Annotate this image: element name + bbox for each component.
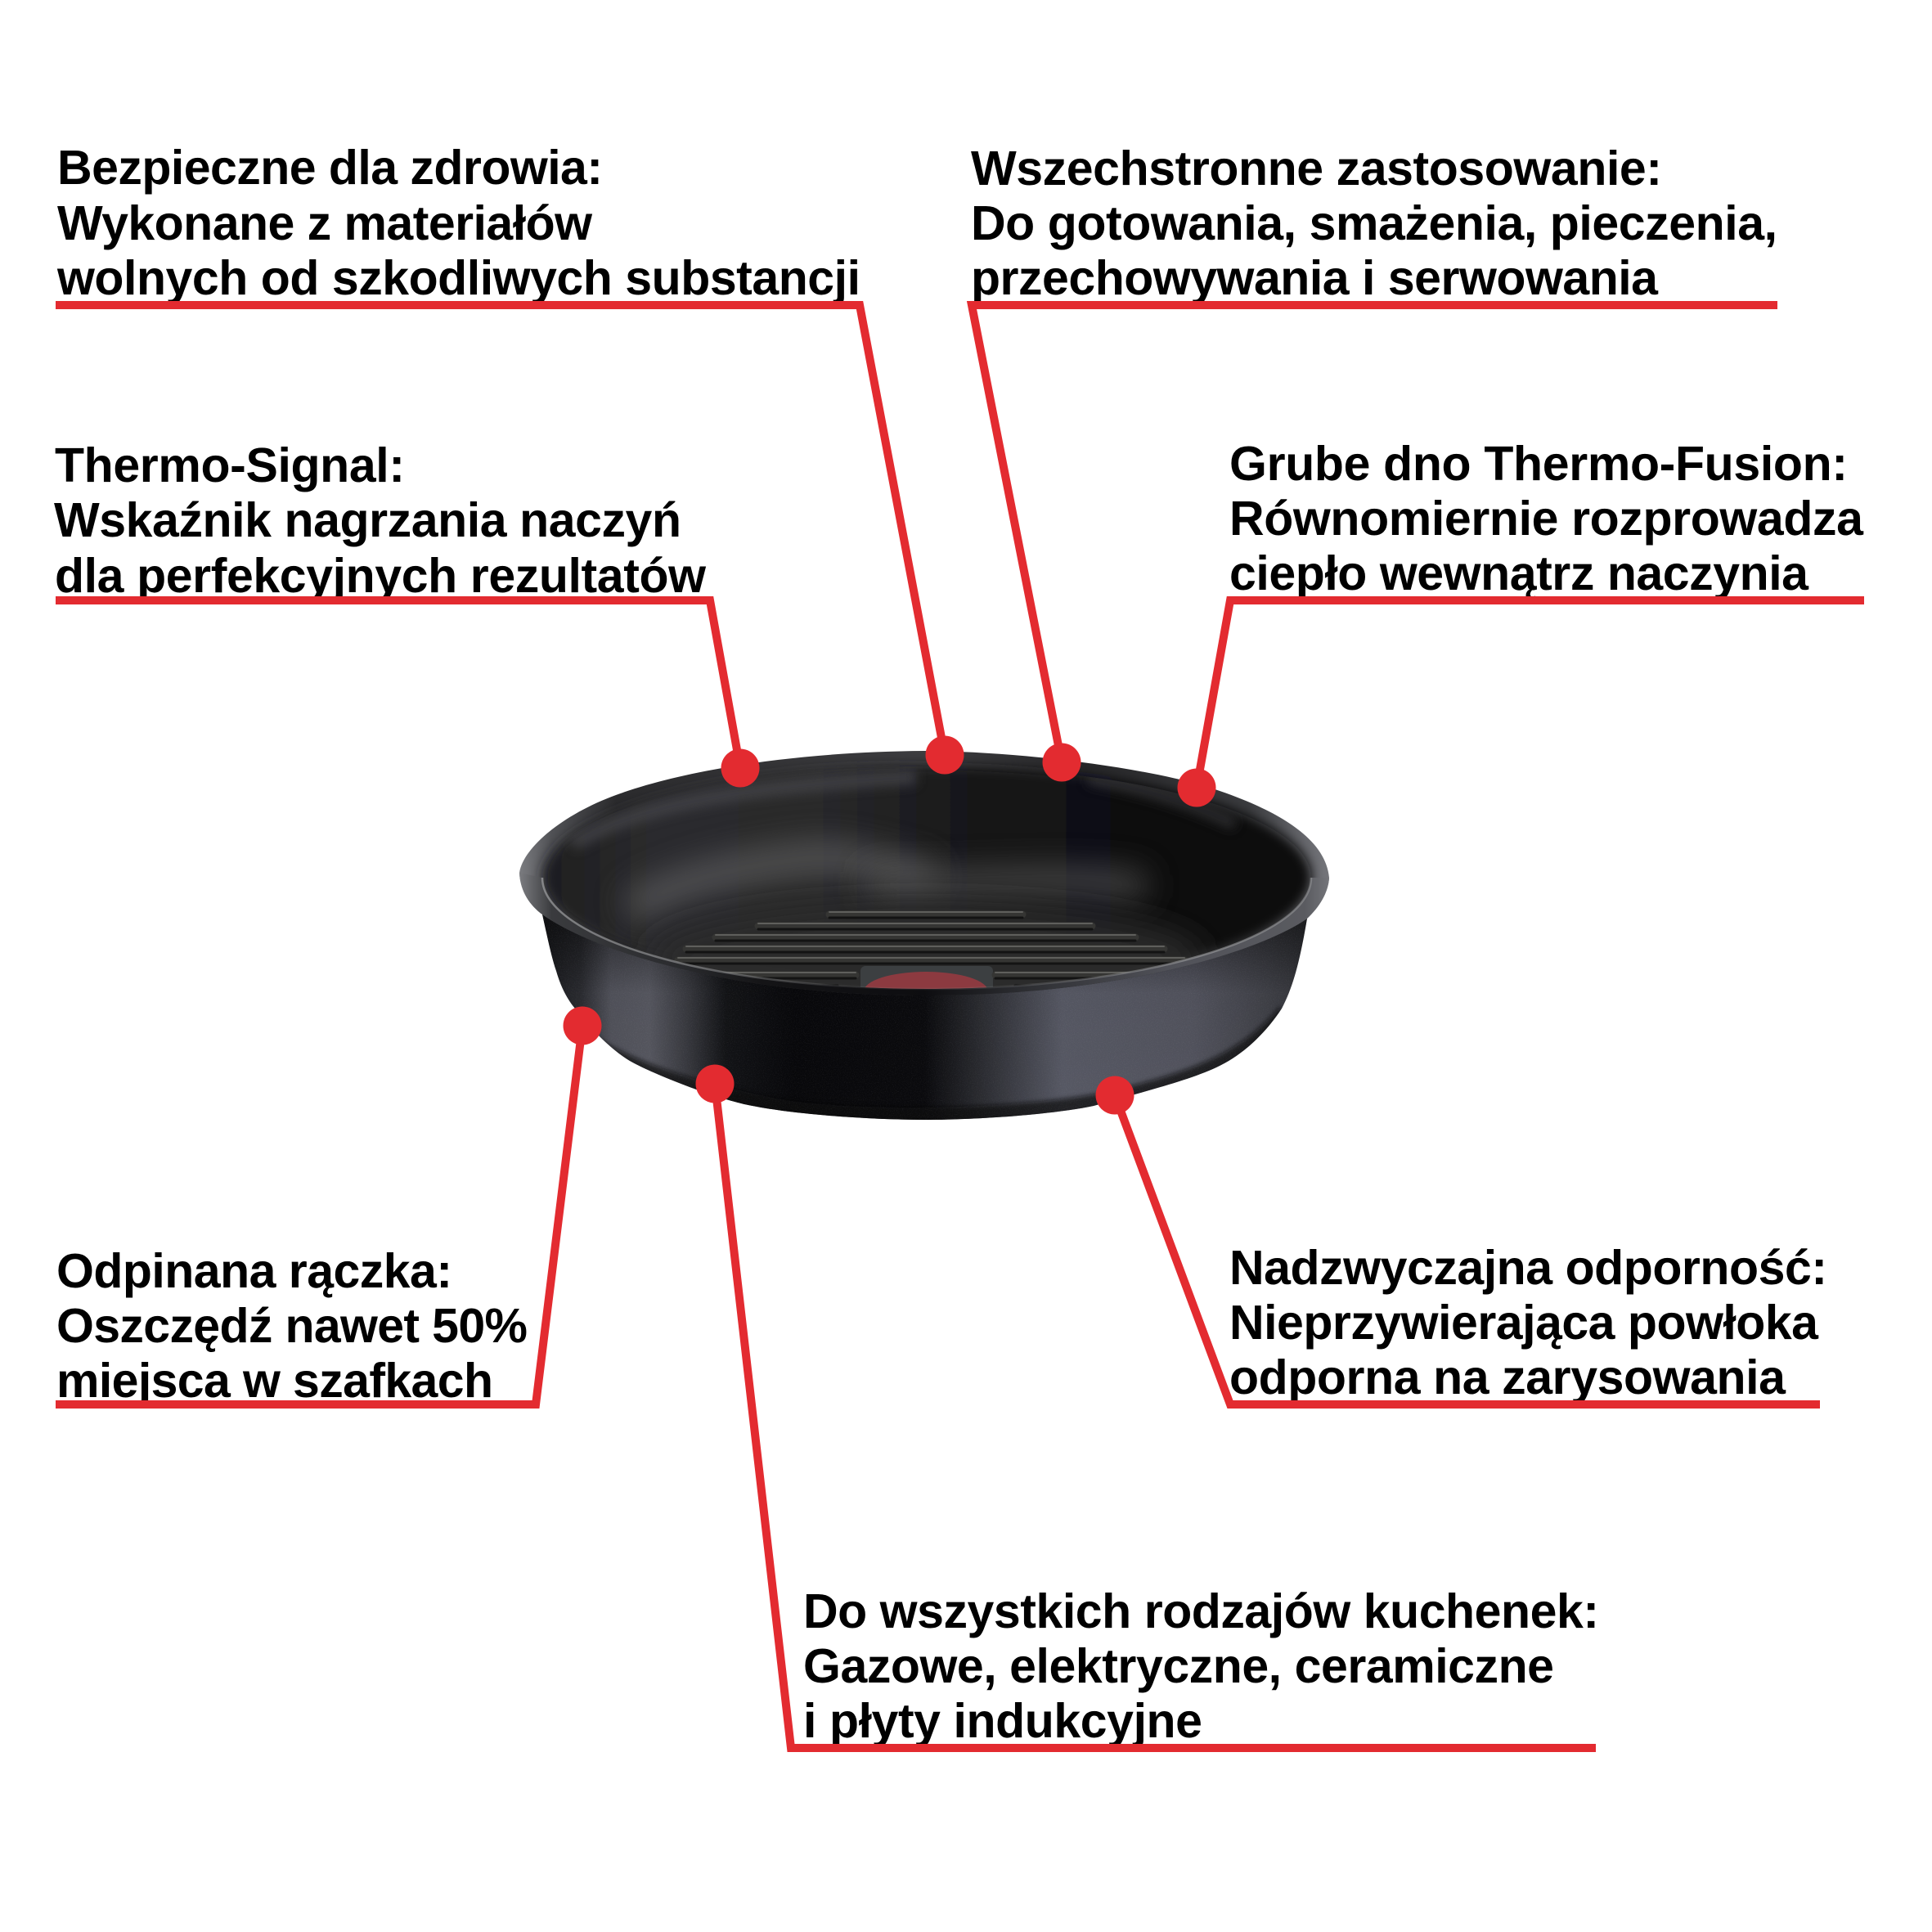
leader line: [56, 1026, 582, 1404]
marker dot: [1096, 1076, 1134, 1114]
text block: Równomiernie rozprowadza: [1229, 492, 1864, 546]
text block: i płyty indukcyjne: [803, 1694, 1202, 1748]
text block: odporna na zarysowania: [1229, 1350, 1786, 1404]
text block: dla perfekcyjnych rezultatów: [55, 549, 706, 603]
leader line: [1115, 1095, 1820, 1404]
text block: wolnych od szkodliwych substancji: [56, 251, 860, 305]
text block: Wszechstronne zastosowanie:: [971, 142, 1662, 195]
leader line: [972, 305, 1777, 762]
marker dot: [1178, 769, 1215, 806]
marker dot: [721, 749, 759, 787]
text block: [803, 1584, 1599, 1748]
leader line: [56, 305, 945, 755]
text block: Grube dno Thermo-Fusion:: [1229, 437, 1848, 491]
text block: Do gotowania, smażenia, pieczenia,: [971, 196, 1777, 250]
text block: Nieprzywierająca powłoka: [1229, 1296, 1819, 1350]
text block: [971, 142, 1777, 305]
marker dot: [926, 736, 964, 774]
callout: Grube dno Thermo-Fusion: [1178, 437, 1864, 806]
text block: Oszczędź nawet 50%: [56, 1299, 528, 1353]
leader line: [715, 1084, 1596, 1748]
text block: Gazowe, elektryczne, ceramiczne: [803, 1639, 1554, 1693]
pan outer body: [542, 914, 1307, 1120]
grill ridges: [678, 912, 1184, 986]
text block: Do wszystkich rodzajów kuchenek:: [803, 1584, 1599, 1638]
callout: Thermo-Signal: [54, 438, 759, 787]
pan rim lip: [519, 751, 1329, 995]
text block: Wskaźnik nagrzania naczyń: [54, 493, 681, 547]
text block: Thermo-Signal:: [55, 438, 405, 492]
grill floor: [857, 909, 1204, 986]
callout: Bezpieczne dla zdrowia: [56, 141, 964, 774]
illustration: grill pan: [515, 751, 1333, 1145]
text block: Nadzwyczajna odporność:: [1229, 1241, 1827, 1295]
marker dot: [695, 1065, 735, 1103]
text block: Odpinana rączka:: [56, 1244, 452, 1298]
text block: [54, 438, 706, 603]
text block: [56, 1244, 528, 1408]
pan front rim edge: [542, 878, 1311, 989]
leader line: [1197, 600, 1864, 788]
thermo-signal red spot: [865, 972, 986, 989]
marker dot: [563, 1006, 602, 1045]
pan front rim band: [519, 873, 1329, 995]
text block: Bezpieczne dla zdrowia:: [57, 141, 603, 195]
callout: Wszechstronne zastosowanie: [971, 142, 1777, 782]
callout: Odpinana rączka: [56, 1006, 602, 1408]
text block: ciepło wewnątrz naczynia: [1229, 546, 1809, 600]
text block: [1229, 1241, 1827, 1404]
text block: [1229, 437, 1864, 600]
floor patch around indicator: [860, 966, 993, 987]
text block: Wykonane z materiałów: [57, 196, 592, 250]
pan interior: [542, 766, 1311, 1013]
leader line: [56, 600, 740, 768]
interior wall highlights: [573, 777, 1235, 910]
text block: przechowywania i serwowania: [971, 251, 1659, 305]
text block: miejsca w szafkach: [56, 1354, 493, 1408]
text block: [56, 141, 860, 305]
callout: Nadzwyczajna odporność: [1096, 1076, 1827, 1404]
callout: Do wszystkich rodzajów kuchenek: [695, 1065, 1599, 1748]
marker dot: [1042, 743, 1081, 782]
